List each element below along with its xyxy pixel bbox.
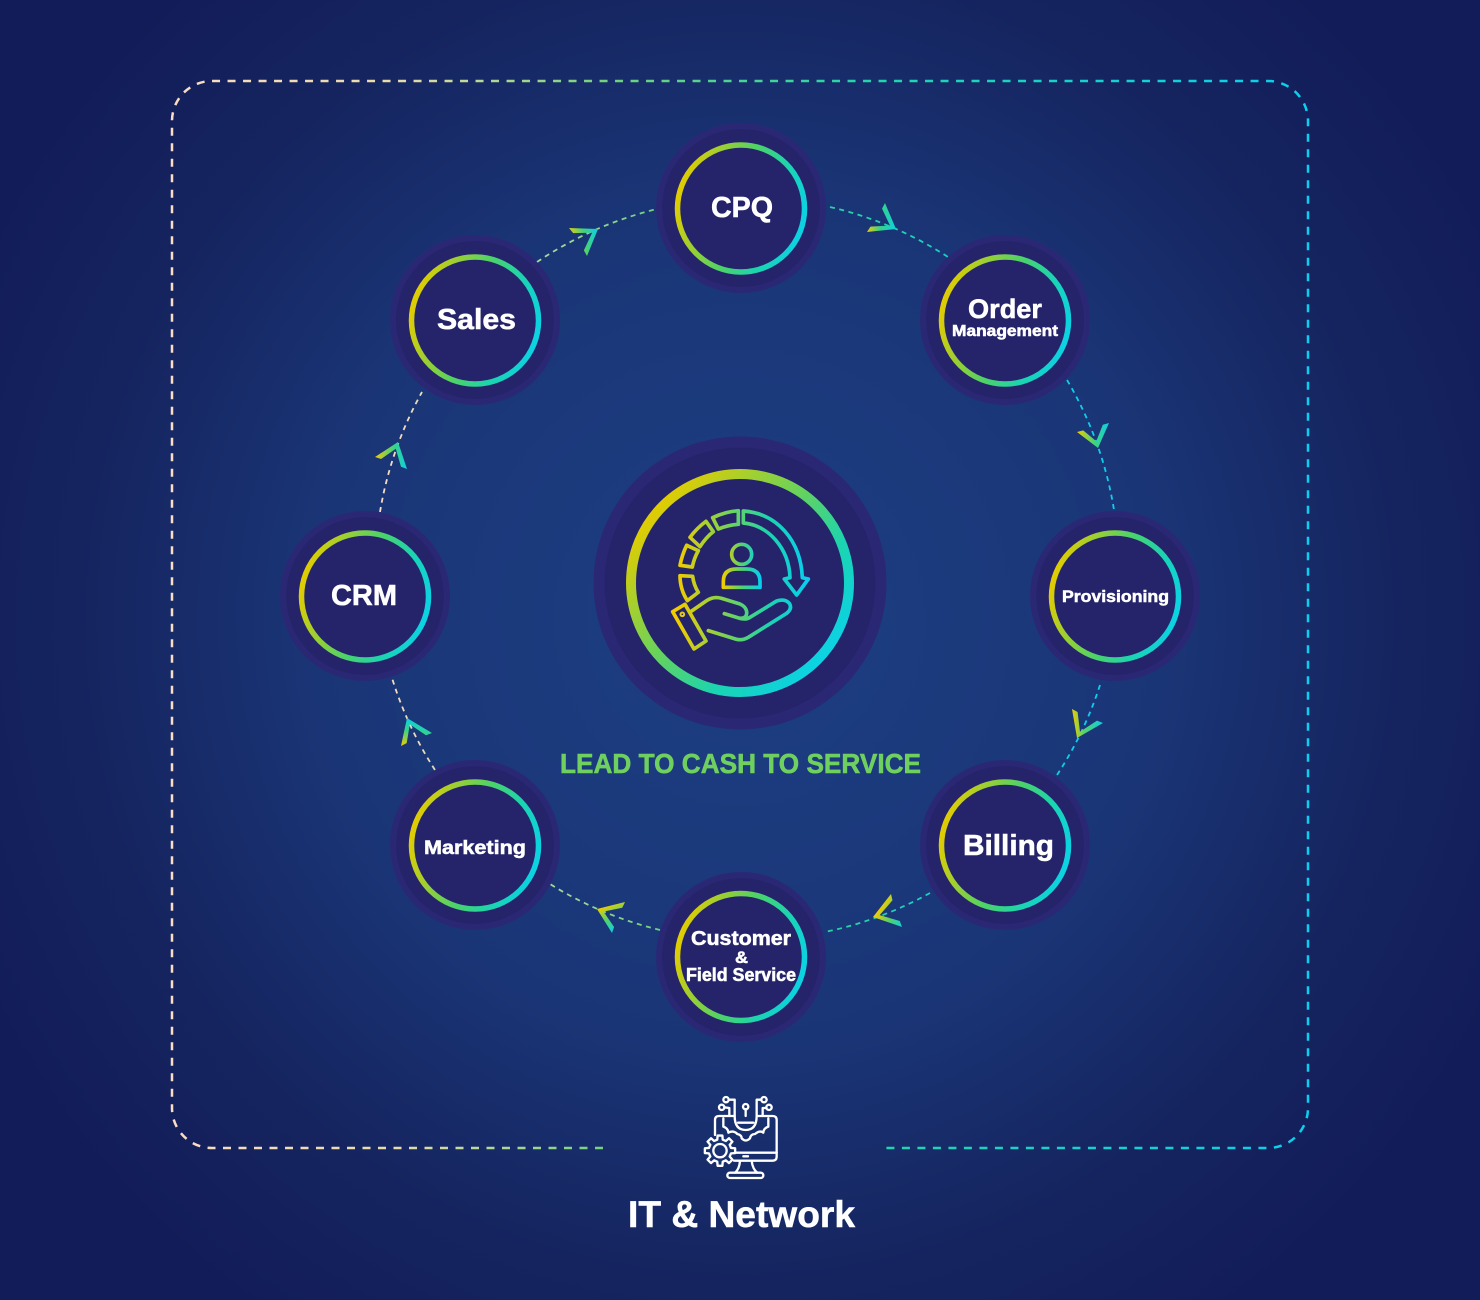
dashed cycle connectors (380, 207, 1114, 932)
node: Provisioning (1030, 511, 1200, 681)
dashed boundary frame (172, 81, 1308, 1148)
node: CRM: CRM (331, 580, 397, 612)
central hub (594, 436, 886, 730)
node: Customer and Field Service: Field Service (686, 965, 796, 985)
icon: IT and network monitor with gears (705, 1097, 777, 1178)
node: CRM (280, 511, 450, 681)
arrow: Sales to CPQ (569, 228, 598, 256)
node: Order Management (920, 235, 1090, 405)
node: Order Management: Order (968, 294, 1042, 324)
arrow: Billing to Customer and Field Service (873, 894, 902, 927)
node: Marketing: Marketing (424, 837, 526, 859)
icon: customer lifecycle in hand (673, 511, 808, 649)
node: Customer and Field Service (656, 872, 826, 1042)
node: Customer and Field Service: & (735, 948, 748, 967)
node: Sales (390, 235, 560, 405)
node: Billing: Billing (963, 830, 1054, 862)
node: Marketing (390, 760, 560, 930)
title: LEAD TO CASH TO SERVICE (560, 748, 921, 779)
arrow: CPQ to Order Management (867, 203, 896, 232)
node: CPQ: CPQ (711, 192, 773, 224)
arrow: Order Management to Provisioning (1077, 423, 1109, 448)
node: Customer and Field Service: Customer (691, 928, 791, 950)
arrow: Marketing to CRM (401, 718, 432, 746)
arrow: CRM to Sales (375, 442, 407, 469)
node: Sales: Sales (437, 304, 516, 336)
arrow: Customer and Field Service to Marketing (597, 902, 625, 933)
node: Order Management: Management (952, 323, 1058, 340)
node: Provisioning: Provisioning (1062, 587, 1169, 606)
footer label: IT and Network: IT & Network (628, 1194, 855, 1235)
node: Billing (920, 760, 1090, 930)
arrow: Provisioning to Billing (1072, 709, 1103, 738)
node: CPQ (656, 123, 826, 293)
